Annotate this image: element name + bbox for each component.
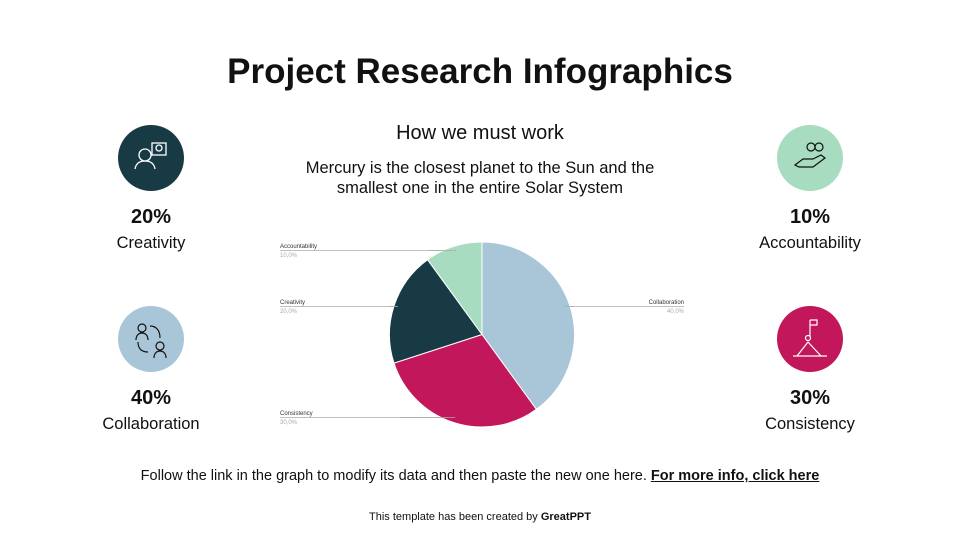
item: accountability: 10% — [790, 206, 830, 228]
subtitle: How we must work — [396, 122, 564, 144]
title: Project Research Infographics — [227, 52, 733, 91]
item: collaboration: Collaboration — [102, 415, 200, 433]
item: collaboration — [102, 306, 200, 433]
item: creativity: 20% — [131, 206, 171, 228]
icon: accountability — [777, 125, 843, 191]
item: creativity: Creativity — [117, 234, 185, 252]
footer note: Follow the link in the graph to modify its data and then paste the new one here. For more info, click here — [141, 468, 819, 484]
pie chart: Consistency — [280, 411, 313, 417]
icon: consistency — [777, 306, 843, 372]
pie chart: 10,0% — [280, 253, 298, 259]
pie chart: Accountability — [280, 244, 317, 250]
slice: consistency — [394, 334, 536, 427]
icon: creativity — [118, 125, 184, 191]
pie chart — [280, 242, 685, 426]
item: consistency: Consistency — [765, 415, 855, 433]
pie chart: 20,0% — [280, 309, 298, 315]
pie chart: Collaboration — [649, 300, 684, 306]
pie chart: 30,0% — [280, 420, 298, 426]
description: Mercury is the closest planet to the Sun and the smallest one in the entire Solar System — [306, 159, 654, 197]
pie chart: Creativity — [280, 300, 305, 306]
slice: accountability — [428, 242, 482, 334]
slice: creativity — [389, 260, 482, 363]
icon: collaboration — [118, 306, 184, 372]
slice: collaboration — [482, 242, 574, 409]
credit: This template has been created by GreatPPT — [369, 511, 591, 523]
item: accountability — [759, 125, 861, 252]
item: accountability: Accountability — [759, 234, 861, 252]
pie chart: 40,0% — [667, 309, 685, 315]
item: consistency — [765, 306, 855, 433]
item: consistency: 30% — [790, 387, 830, 409]
item: creativity — [117, 125, 186, 252]
item: collaboration: 40% — [131, 387, 171, 409]
